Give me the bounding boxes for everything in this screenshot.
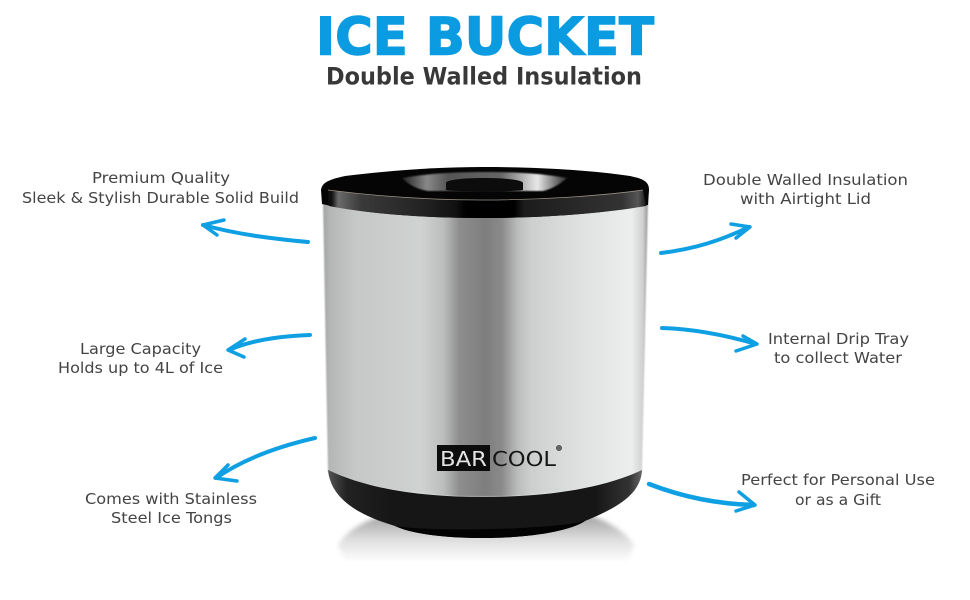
reflection: [338, 516, 634, 562]
label: ice tongs: [85, 490, 257, 527]
label: drip tray: to collect Water: [774, 349, 903, 367]
arrow: premium quality: [203, 220, 308, 242]
label: personal use: or as a Gift: [795, 491, 881, 509]
black base: [328, 470, 642, 538]
label: premium quality: Premium Quality: [92, 169, 230, 187]
lid: [321, 167, 649, 218]
label: personal use: Perfect for Personal Use: [741, 471, 935, 489]
label: personal use: [741, 471, 935, 509]
label: ice tongs: Steel Ice Tongs: [111, 509, 232, 527]
label: large capacity: Holds up to 4L of Ice: [58, 359, 223, 377]
arrow: ice tongs: [215, 438, 315, 481]
brand logo: COOL: [492, 447, 557, 471]
label: drip tray: [768, 330, 909, 367]
label: premium quality: Sleek & Stylish Durable Solid Build: [22, 189, 299, 207]
stainless steel body: [323, 200, 648, 497]
label: large capacity: Large Capacity: [80, 340, 201, 358]
arrow: large capacity: [228, 335, 310, 357]
brand logo: BAR: [440, 447, 487, 471]
title: ICE BUCKET: [316, 8, 655, 68]
label: ice tongs: Comes with Stainless: [85, 490, 257, 508]
brand logo: [437, 445, 562, 471]
arrow: drip tray: [662, 328, 757, 351]
product: ice bucket: [321, 167, 649, 562]
lid knob: [446, 178, 523, 192]
label: double walled: Double Walled Insulation: [703, 171, 908, 189]
label: premium quality: [22, 169, 299, 207]
label: double walled: [703, 171, 908, 208]
label: drip tray: Internal Drip Tray: [768, 330, 909, 348]
label: large capacity: [58, 340, 223, 377]
label: double walled: with Airtight Lid: [740, 190, 871, 208]
arrow: double walled: [661, 224, 750, 253]
arrow: personal use: [649, 484, 755, 511]
subtitle: Double Walled Insulation: [326, 62, 642, 90]
lid dome: [402, 172, 567, 191]
